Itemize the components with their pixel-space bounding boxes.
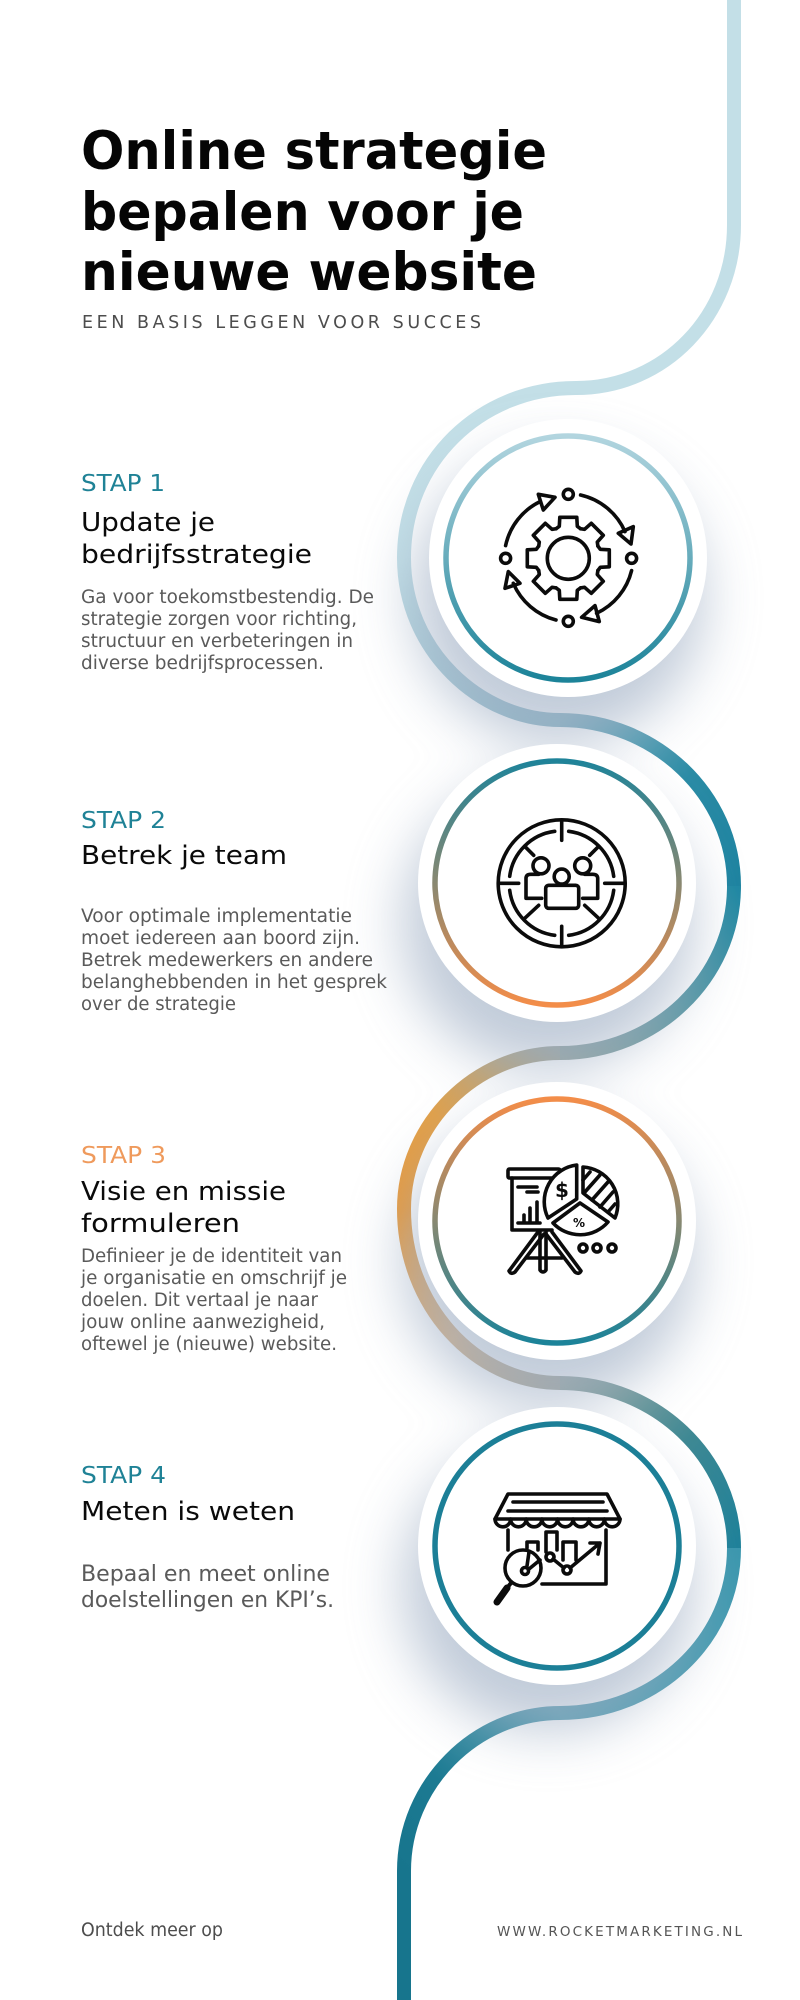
- step 2 body: belanghebbenden in het gesprek: [81, 972, 387, 993]
- footer left text: Ontdek meer op: [81, 1920, 223, 1941]
- curved ribbon: [404, 0, 734, 2000]
- icon: storefront with analytics: [495, 1494, 620, 1602]
- step 1 body: Ga voor toekomstbestendig. De: [81, 587, 374, 608]
- circle shadows: [402, 452, 704, 1732]
- step 3 body: Definieer je de identiteit van: [81, 1246, 342, 1267]
- icon: gear with cycle arrows: [501, 489, 637, 626]
- step 3 body: doelen. Dit vertaal je naar: [81, 1290, 318, 1311]
- step 4 body: doelstellingen en KPI’s.: [81, 1587, 334, 1613]
- title: nieuwe website: [81, 242, 537, 303]
- step 1 heading: bedrijfsstrategie: [81, 540, 312, 570]
- step 2 body: Betrek medewerkers en andere: [81, 950, 373, 971]
- subtitle: EEN BASIS LEGGEN VOOR SUCCES: [82, 313, 481, 333]
- step 1 label: STAP 1: [81, 471, 165, 497]
- title: bepalen voor je: [81, 182, 524, 243]
- title: [81, 121, 547, 303]
- step 1 heading: [81, 508, 312, 570]
- step 4 body: [81, 1561, 334, 1613]
- step 2 body: over de strategie: [81, 994, 236, 1015]
- step 4 heading: Meten is weten: [81, 1497, 295, 1527]
- circle 3: [418, 1082, 696, 1360]
- step 1 body: strategie zorgen voor richting,: [81, 609, 357, 630]
- icon: presentation board and pie chart: %: [573, 1216, 585, 1230]
- step 2 body: [81, 906, 387, 1015]
- title: Online strategie: [81, 121, 547, 182]
- step 3 label: STAP 3: [81, 1143, 166, 1169]
- circle 4: [418, 1407, 696, 1685]
- step 4 text: [81, 1463, 334, 1613]
- footer website: WWW.ROCKETMARKETING.NL: [497, 1924, 742, 1940]
- step 3 heading: [81, 1177, 286, 1239]
- icon: presentation board and pie chart: [508, 1165, 618, 1273]
- step 3 body: [80, 1246, 347, 1355]
- step 1 body: [81, 587, 374, 674]
- step 3 body: jouw online aanwezigheid,: [80, 1312, 325, 1333]
- step 3 text: [80, 1143, 347, 1355]
- icon: presentation board and pie chart: $: [555, 1178, 569, 1202]
- step 2 label: STAP 2: [81, 808, 166, 834]
- step 3 heading: formuleren: [81, 1209, 240, 1239]
- step 3 body: je organisatie en omschrijf je: [80, 1268, 347, 1289]
- step 2 body: Voor optimale implementatie: [81, 906, 352, 927]
- step 2 body: moet iedereen aan boord zijn.: [81, 928, 360, 949]
- step 1 text: [81, 471, 374, 674]
- step 1 body: diverse bedrijfsprocessen.: [81, 653, 324, 674]
- step 4 label: STAP 4: [81, 1463, 166, 1489]
- icon: team in target: [498, 820, 625, 947]
- step 1 body: structuur en verbeteringen in: [81, 631, 353, 652]
- step 2 heading: Betrek je team: [81, 841, 287, 871]
- step 3 heading: Visie en missie: [81, 1177, 286, 1207]
- step 4 body: Bepaal en meet online: [81, 1561, 330, 1587]
- circle 1: [429, 419, 707, 697]
- step 3 body: oftewel je (nieuwe) website.: [81, 1334, 337, 1355]
- step 2 text: [81, 808, 387, 1015]
- circle 2: [418, 744, 696, 1022]
- step 1 heading: Update je: [81, 508, 215, 538]
